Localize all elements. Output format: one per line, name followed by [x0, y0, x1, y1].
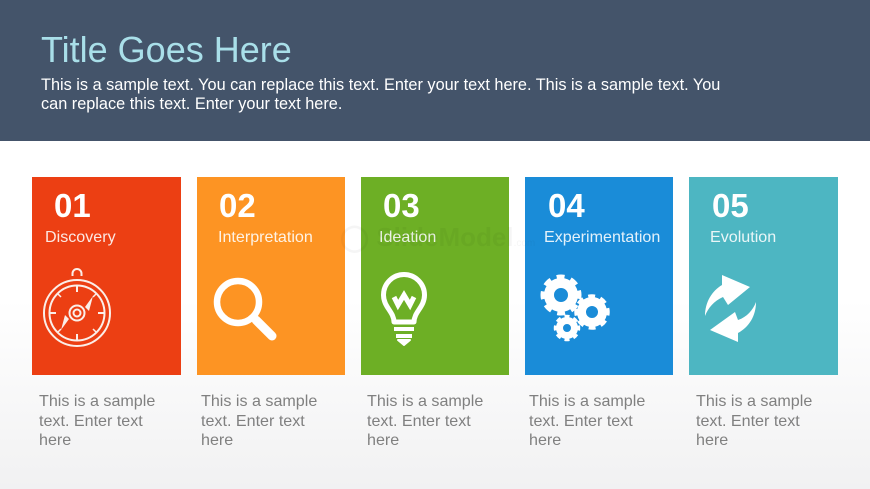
icon: gears	[543, 277, 608, 340]
text: description 3: This is a sample	[367, 392, 483, 410]
text: description 1: here	[39, 431, 71, 449]
panel: interpretation	[197, 177, 345, 375]
text: description 3	[367, 392, 483, 449]
number 05: 05	[712, 187, 749, 224]
text: description 5: This is a sample	[696, 392, 812, 410]
text: description 1: This is a sample	[39, 392, 155, 410]
label evolution: Evolution	[710, 228, 776, 246]
panel: discovery	[32, 177, 181, 375]
text: description 1: text. Enter text	[39, 412, 143, 430]
label ideation: Ideation	[379, 228, 436, 246]
text: description 4: here	[529, 431, 561, 449]
header text: This is a sample text. You can replace this text. Enter your text here. This is a sample text. You	[41, 76, 720, 94]
text: description 5	[696, 392, 812, 449]
text: description 1	[39, 392, 155, 449]
header text	[41, 76, 720, 113]
icon: magnifier	[217, 281, 272, 336]
text: description 2	[201, 392, 317, 449]
number 04: 04	[548, 187, 585, 224]
text: description 3: text. Enter text	[367, 412, 471, 430]
title: Title Goes Here	[41, 29, 292, 70]
text: description 2: here	[201, 431, 233, 449]
watermark: ◯ SlideModel.com	[340, 222, 535, 252]
icon: light bulb	[383, 274, 424, 345]
icon: cycle arrows	[705, 275, 756, 342]
panel: experimentation	[525, 177, 673, 375]
header text: can replace this text. Enter your text here.	[41, 95, 342, 113]
number 01: 01	[54, 187, 91, 224]
number 03: 03	[383, 187, 420, 224]
text: description 4: This is a sample	[529, 392, 645, 410]
text: description 4	[529, 392, 645, 449]
text: description 5: here	[696, 431, 728, 449]
panel: ideation	[361, 177, 509, 375]
label interpretation: Interpretation	[218, 228, 313, 246]
header band	[0, 0, 870, 141]
label experimentation: Experimentation	[544, 228, 660, 246]
number 02: 02	[219, 187, 256, 224]
text: description 3: here	[367, 431, 399, 449]
text: description 4: text. Enter text	[529, 412, 633, 430]
icon: compass	[44, 269, 110, 346]
text: description 5: text. Enter text	[696, 412, 800, 430]
text: description 2: text. Enter text	[201, 412, 305, 430]
panel: evolution	[689, 177, 838, 375]
text: description 2: This is a sample	[201, 392, 317, 410]
label discovery: Discovery	[45, 228, 116, 246]
